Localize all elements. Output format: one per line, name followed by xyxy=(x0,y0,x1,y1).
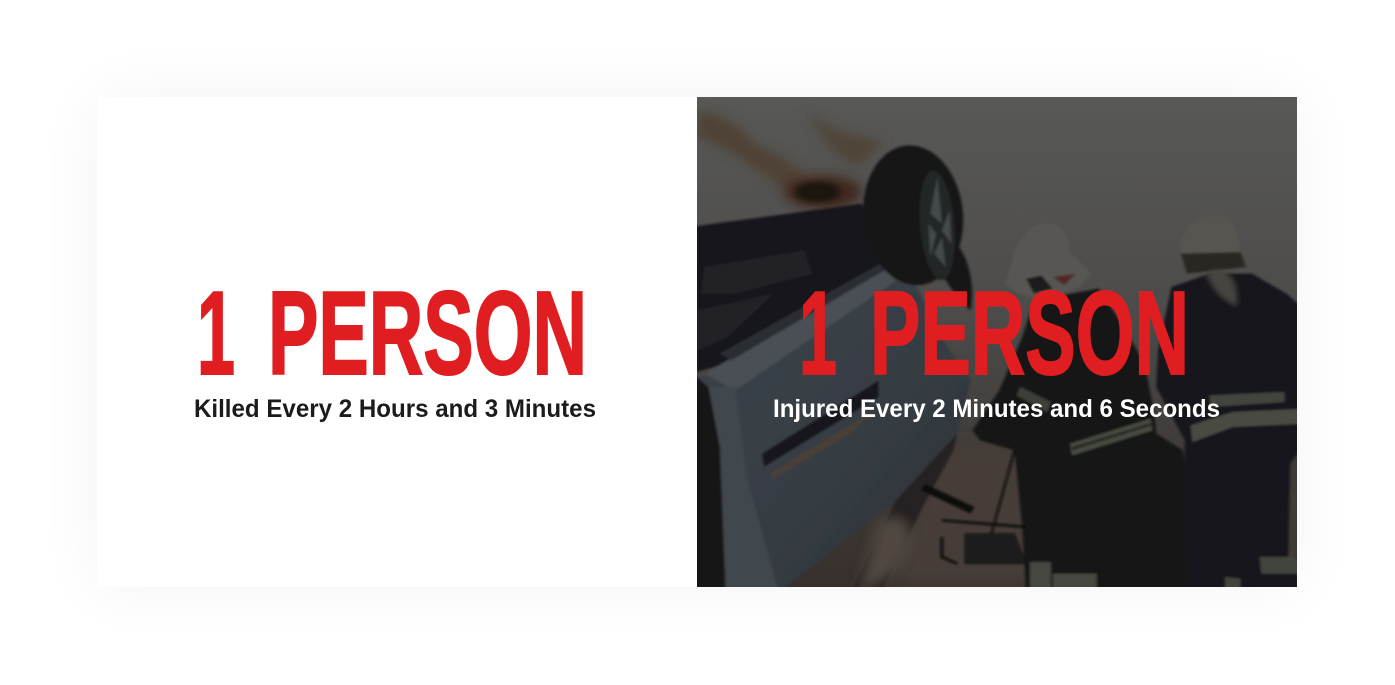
wheel rim xyxy=(916,169,959,281)
right headline xyxy=(799,267,1189,400)
right headline: PERSON xyxy=(870,267,1189,400)
left headline: PERSON xyxy=(268,267,587,400)
ground haze xyxy=(888,447,1297,587)
background sky xyxy=(697,97,1297,587)
car side panel xyxy=(689,267,971,594)
smoke plume xyxy=(697,110,884,209)
left headline xyxy=(197,267,587,400)
panel: left white card with shadow xyxy=(97,97,1297,587)
rescue tool and hoses xyxy=(923,450,1026,564)
left caption: Killed Every 2 Hours and 3 Minutes xyxy=(194,395,596,423)
helmet xyxy=(1005,224,1091,300)
panel: crash scene photo illustration xyxy=(697,97,1297,587)
firefighter 2 xyxy=(1156,215,1305,594)
right caption: Injured Every 2 Minutes and 6 Seconds xyxy=(773,395,1220,423)
scene foreground xyxy=(689,142,1305,594)
body xyxy=(1156,274,1305,594)
firefighter 1 xyxy=(973,224,1193,594)
car underside xyxy=(689,204,896,374)
left headline: 1 xyxy=(197,267,235,400)
tyre xyxy=(858,142,968,288)
helmet xyxy=(1180,215,1240,257)
reflective stripes xyxy=(1070,419,1152,455)
right headline: 1 xyxy=(799,267,837,400)
body xyxy=(973,289,1193,594)
overturned car xyxy=(689,142,972,594)
reflective stripes xyxy=(1191,409,1305,442)
